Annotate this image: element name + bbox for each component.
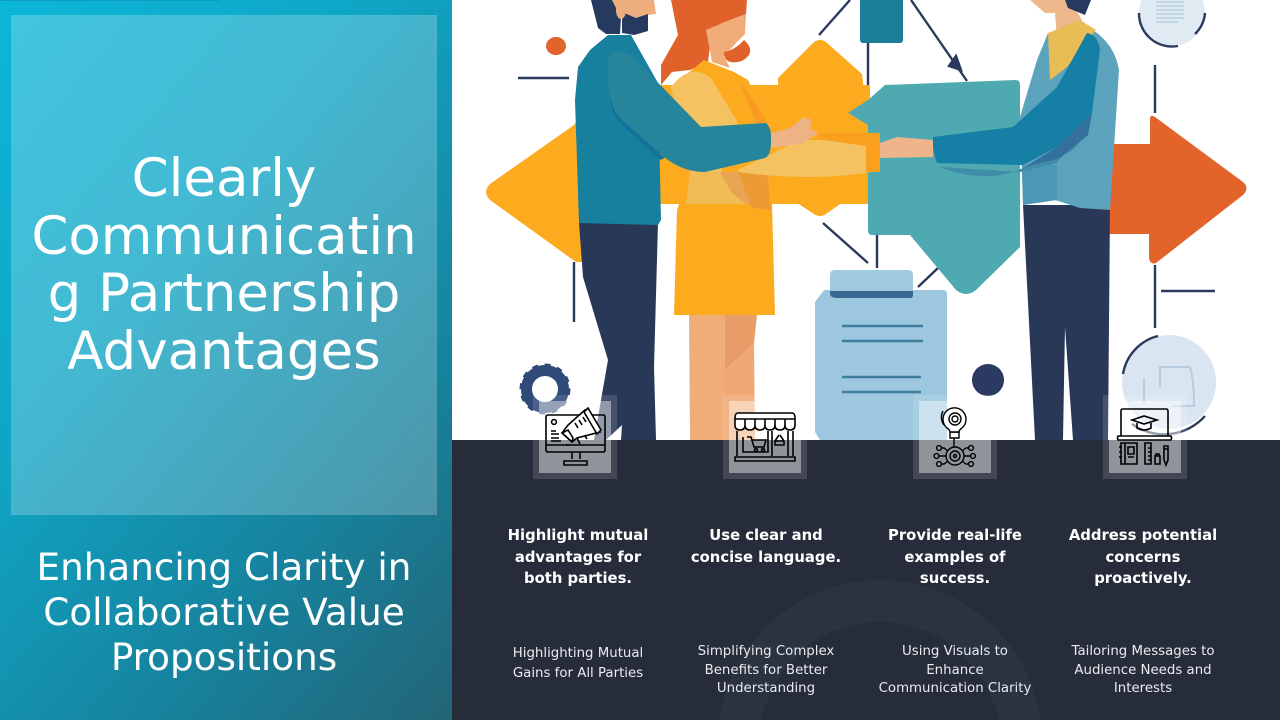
orange dot — [546, 37, 566, 55]
description: column 2 — [698, 644, 834, 696]
heading: column 3 — [888, 527, 1022, 587]
navy dot — [972, 364, 1004, 396]
heading: column 2: Use clear and — [709, 527, 823, 544]
panel: translucent title card — [11, 15, 437, 515]
teal speech arrow — [848, 80, 1020, 294]
title: g Partnership — [48, 263, 400, 324]
description: column 3: Using Visuals to — [902, 644, 1008, 659]
description: column 4: Tailoring Messages to — [1072, 644, 1214, 659]
man on the right — [880, 0, 1119, 440]
description: column 1: Highlighting Mutual — [513, 646, 643, 661]
panel: left gradient background — [0, 0, 452, 720]
yellow diamond — [778, 40, 864, 92]
top right circle — [1139, 0, 1205, 47]
icon tile: online store — [723, 395, 807, 479]
bottom right circle — [1122, 335, 1216, 434]
description: column 4: Audience Needs and — [1074, 662, 1212, 678]
clipboard — [815, 270, 947, 440]
thin connector lines — [518, 0, 1215, 328]
heading: column 4: Address potential — [1069, 527, 1217, 544]
yellow left arrow — [486, 85, 870, 262]
title: Clearly — [132, 148, 316, 209]
description: column 2: Benefits for Better — [705, 662, 827, 678]
subtitle — [37, 545, 411, 679]
title: Communicatin — [31, 206, 417, 267]
heading: column 4: concerns — [1106, 549, 1180, 566]
description: column 1 — [513, 646, 643, 681]
subtitle: Propositions — [111, 635, 337, 679]
description: column 4 — [1071, 644, 1214, 696]
gear icon — [521, 365, 569, 413]
heading: column 2 — [691, 527, 841, 566]
heading: column 3: success. — [920, 570, 990, 587]
heading: column 1: advantages for — [515, 549, 641, 566]
woman — [661, 0, 880, 440]
heading: column 3: Provide real-life — [888, 527, 1022, 544]
description: column 3: Enhance — [926, 662, 984, 678]
title: Advantages — [67, 321, 381, 382]
yellow lower diamond — [788, 158, 885, 216]
heading: column 3: examples of — [904, 549, 1006, 566]
icon tile: marketing monitor — [533, 395, 617, 479]
description: column 2: Understanding — [717, 681, 815, 696]
heading: column 1: Highlight mutual — [508, 527, 648, 544]
description: column 2: Simplifying Complex — [698, 644, 834, 659]
panel: dark lower background — [452, 440, 1280, 720]
heading: column 1 — [508, 527, 648, 587]
orange right arrow — [1100, 116, 1246, 263]
heading: column 1: both parties. — [524, 570, 632, 587]
subtitle: Collaborative Value — [43, 590, 405, 634]
heading: column 4 — [1069, 527, 1217, 587]
subtitle: Enhancing Clarity in — [37, 545, 411, 589]
icon tile: online education — [1103, 395, 1187, 479]
illustration: partners shaking hands — [486, 0, 1246, 440]
description: column 3: Communication Clarity — [879, 681, 1031, 696]
icon tile: idea bulb network — [913, 395, 997, 479]
description: column 1: Gains for All Parties — [513, 666, 643, 681]
title — [31, 148, 417, 382]
top teal box — [860, 0, 903, 43]
heading: column 2: concise language. — [691, 549, 841, 566]
description: column 3 — [879, 644, 1031, 696]
man on the left — [575, 0, 818, 440]
description: column 4: Interests — [1114, 681, 1172, 696]
heading: column 4: proactively. — [1094, 570, 1192, 587]
